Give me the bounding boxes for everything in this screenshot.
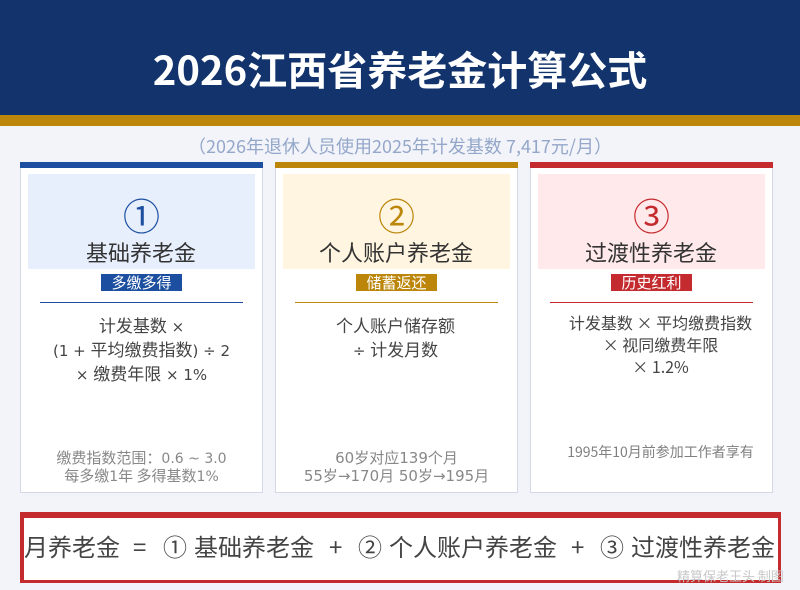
tag: 储蓄返还 [366,272,426,293]
formula: 计发基数 × [99,312,184,337]
note: 60岁对应139个月 [335,449,458,467]
panel: transitional pension [530,162,773,493]
panel name: 过渡性养老金 [585,236,717,268]
panel header [283,174,510,269]
formula: × 视同缴费年限 [603,332,718,356]
panel top bar [20,162,263,168]
tag [101,274,182,291]
note: 1995年10月前参加工作者享有 [567,442,754,462]
summary formula text: ③ [600,528,624,563]
rule line [295,302,498,303]
panel top bar [530,162,773,168]
title: 2026江西省养老金计算公式 [153,39,647,97]
panel top bar [275,162,518,168]
note: 55岁→170月 50岁→195月 [304,467,489,485]
formula [569,310,752,378]
subtitle: （2026年退休人员使用2025年计发基数 7,417元/月） [188,133,612,159]
formula [53,312,230,385]
number badge 2: ② [378,187,415,241]
tag: 多缴多得 [111,272,172,293]
tag: 历史红利 [621,272,682,293]
header banner [0,0,800,115]
formula: × 缴费年限 × 1% [76,360,207,385]
formula [336,312,455,361]
rule line [40,302,243,303]
formula: 计发基数 × 平均缴费指数 [569,310,752,334]
number badge 1: ① [123,187,160,241]
formula: (1 + 平均缴费指数) ÷ 2 [53,336,230,361]
watermark: 精算保老王头 制图 [677,566,784,585]
formula: ÷ 计发月数 [353,336,438,361]
panel: basic pension [20,162,263,493]
note: 每多缴1年 多得基数1% [64,465,219,486]
formula: 个人账户储存额 [336,312,455,337]
panel header [538,174,765,269]
summary formula text: + [571,528,584,563]
panel name: 基础养老金 [86,236,196,268]
note [56,447,227,486]
number badge 3: ③ [633,187,670,241]
gold band [0,115,800,126]
note: 缴费指数范围：0.6 ~ 3.0 [56,447,227,468]
summary formula text: 月养老金 [24,528,120,563]
summary formula text: = [133,528,146,563]
summary formula text: 过渡性养老金 [631,528,775,563]
tag [611,274,692,291]
panel name: 个人账户养老金 [319,236,473,268]
rule line [550,302,753,303]
summary formula text: + [329,528,342,563]
summary formula text: ① [163,528,187,563]
note [304,449,489,485]
summary formula box [20,512,781,583]
panel: personal account pension [275,162,518,493]
summary formula text: ② [358,528,382,563]
panel header [28,174,255,269]
summary formula text: 基础养老金 [194,528,314,563]
formula: × 1.2% [632,354,689,378]
summary formula text [24,528,775,563]
tag [356,274,437,291]
summary formula text: 个人账户养老金 [389,528,557,563]
